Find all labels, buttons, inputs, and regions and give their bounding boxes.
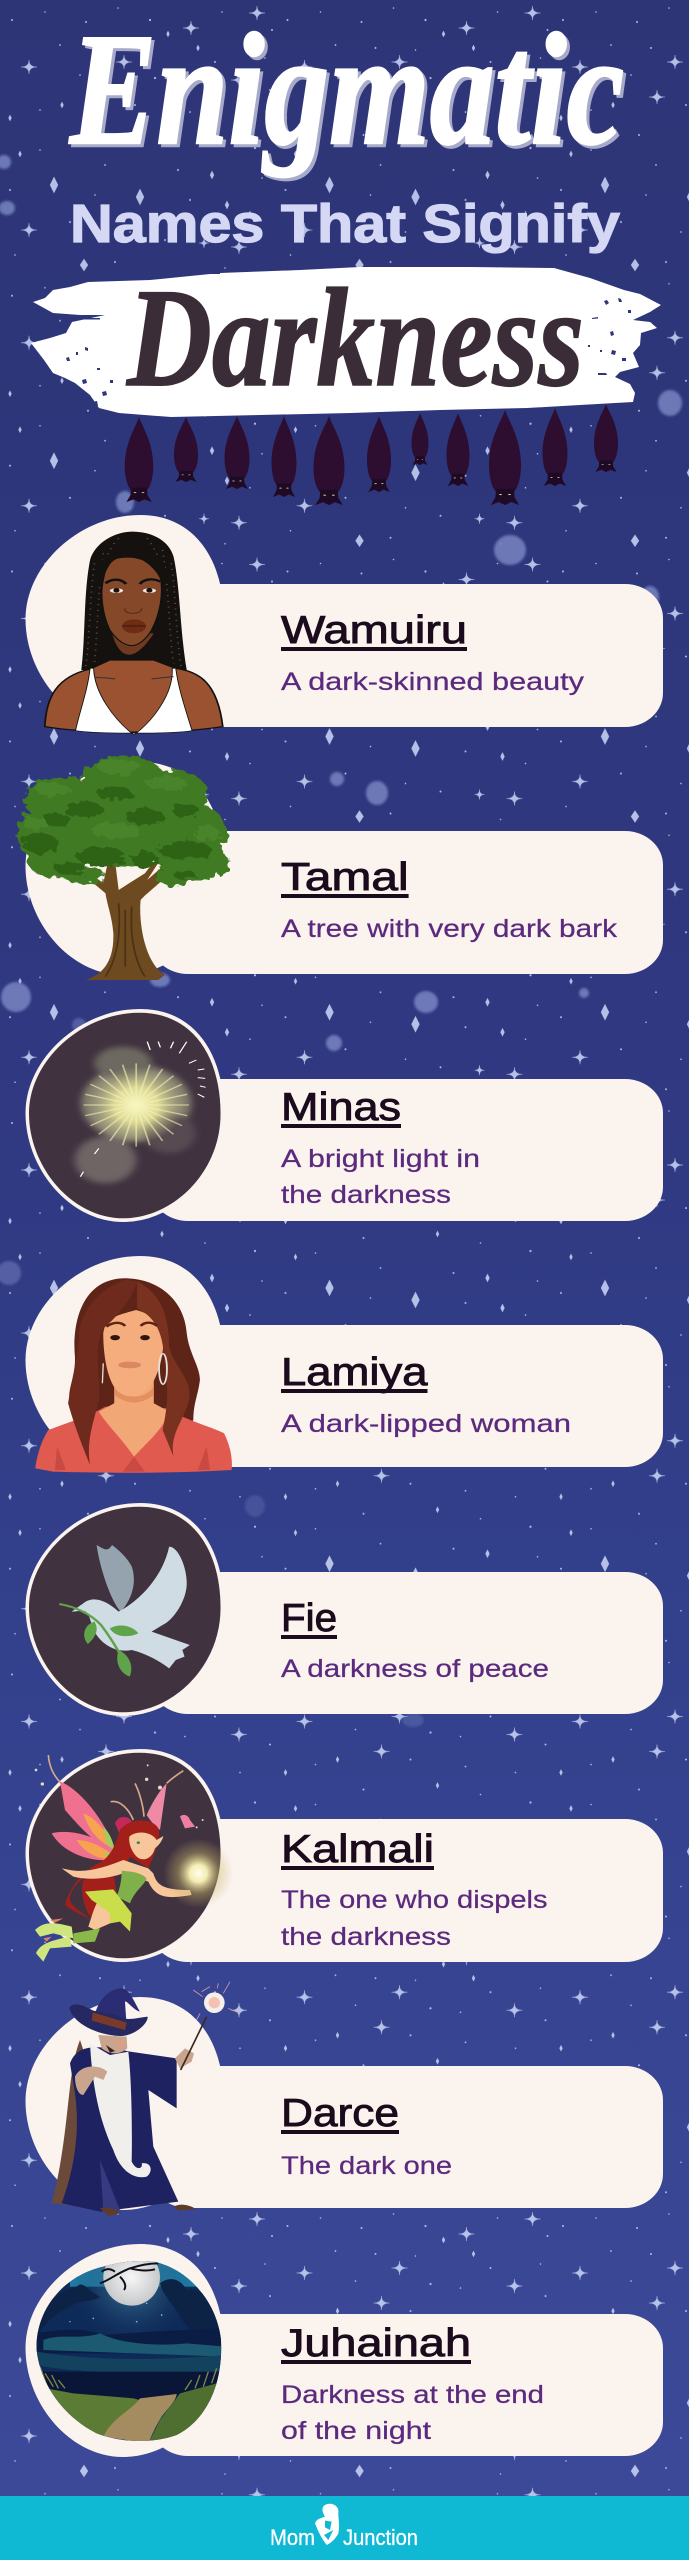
white brush stroke bbox=[31, 267, 661, 417]
subtitle: Names That Signify: Names That Signify bbox=[70, 194, 620, 254]
meaning text: the darkness bbox=[281, 1923, 451, 1951]
panel: Juhainah bbox=[20, 2220, 663, 2460]
name: Fie: Fie bbox=[281, 1597, 337, 1640]
panel: Darce bbox=[26, 1982, 663, 2216]
meaning text bbox=[281, 2381, 544, 2445]
logo wordmark: Junction bbox=[343, 2525, 418, 2550]
icon: wizard with wand bbox=[52, 1982, 240, 2216]
icon: bright light in dark circle bbox=[29, 1013, 221, 1218]
meaning text: of the night bbox=[281, 2417, 431, 2445]
icon: fairy holding a light bbox=[29, 1753, 233, 1962]
meaning text: The dark one bbox=[281, 2152, 452, 2180]
icon: tree bbox=[18, 755, 228, 980]
panel: Minas bbox=[26, 1009, 663, 1222]
name: Wamuiru: Wamuiru bbox=[281, 609, 467, 652]
meaning text: A dark-skinned beauty bbox=[281, 668, 585, 696]
meaning text: A darkness of peace bbox=[281, 1655, 549, 1683]
hanging bats bbox=[125, 404, 618, 505]
card background bbox=[26, 1009, 663, 1222]
logo wordmark: Mom bbox=[270, 2525, 315, 2550]
icon: moonlit night landscape bbox=[36, 2261, 222, 2441]
heading brush stroke with Darkness bbox=[31, 260, 661, 417]
meaning text: Darkness at the end bbox=[281, 2381, 544, 2409]
card background bbox=[26, 1749, 663, 1962]
name: Minas: Minas bbox=[281, 1086, 401, 1129]
card background bbox=[26, 1503, 663, 1716]
panel: Wamuiru bbox=[26, 515, 663, 735]
card background bbox=[26, 1997, 663, 2210]
panel: Tamal bbox=[18, 755, 663, 980]
meaning text: A dark-lipped woman bbox=[281, 1410, 571, 1438]
meaning text bbox=[281, 1145, 480, 1209]
meaning text: A tree with very dark bark bbox=[281, 915, 618, 943]
panel: Lamiya bbox=[26, 1256, 663, 1473]
icon: woman with long brown hair bbox=[35, 1278, 232, 1473]
name: Lamiya: Lamiya bbox=[281, 1351, 428, 1394]
meaning text bbox=[281, 1886, 548, 1951]
meaning text: A bright light in bbox=[281, 1145, 480, 1173]
card background bbox=[26, 2244, 663, 2457]
card background bbox=[26, 1256, 663, 1469]
heading word: Darkness: Darkness bbox=[125, 260, 584, 416]
card background bbox=[26, 515, 663, 728]
panel: Kalmali bbox=[26, 1749, 663, 1962]
logo icon bbox=[315, 2504, 339, 2545]
meaning text: The one who dispels bbox=[281, 1886, 548, 1914]
card background bbox=[26, 762, 663, 975]
panel: Fie bbox=[26, 1503, 663, 1716]
name: Kalmali: Kalmali bbox=[281, 1828, 434, 1871]
icon: white dove with olive branch bbox=[29, 1507, 221, 1712]
meaning text: the darkness bbox=[281, 1181, 451, 1209]
name: Tamal: Tamal bbox=[281, 856, 409, 899]
name: Juhainah: Juhainah bbox=[281, 2322, 471, 2365]
name: Darce: Darce bbox=[281, 2092, 399, 2135]
logo wordmark bbox=[270, 2525, 418, 2550]
footer bar with MomJunction logo bbox=[0, 2496, 689, 2560]
icon: woman with braids bbox=[45, 532, 223, 735]
